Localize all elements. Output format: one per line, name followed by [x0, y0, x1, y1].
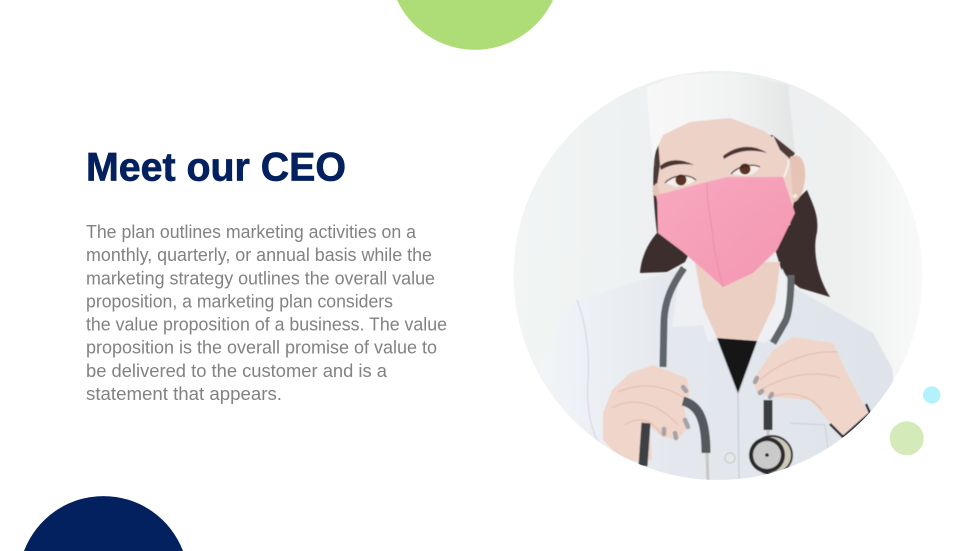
body text: The plan outlines marketing activities on a: [86, 221, 417, 242]
left finger lines: [612, 386, 684, 436]
earring: [793, 194, 797, 198]
decorative dot: cyan: [923, 386, 940, 404]
right nails: [755, 378, 772, 397]
collar right: [758, 268, 788, 342]
left nails: [664, 387, 688, 438]
hair back: [640, 135, 830, 297]
stethoscope chest piece: [764, 400, 772, 430]
coat button: [725, 453, 735, 463]
right finger lines: [757, 352, 840, 410]
stethoscope tubes: [663, 268, 684, 367]
left brow: [660, 160, 694, 170]
watch strap: [830, 404, 870, 437]
left arm and hand: [603, 365, 690, 462]
coat front edge: [717, 338, 757, 480]
body text: [86, 221, 447, 404]
mask: [657, 177, 795, 287]
face: [654, 118, 794, 226]
left sleeve seam: [577, 300, 600, 445]
right arm and hand: [753, 337, 868, 435]
coat body: [638, 270, 893, 480]
body text: marketing strategy outlines the overall value: [86, 267, 435, 288]
photo: doctor in pink mask: [510, 65, 930, 485]
hat: [647, 72, 795, 157]
decorative circle: green top: [397, 0, 553, 50]
ear left: [653, 183, 660, 196]
title: Meet our CEO: [86, 146, 346, 190]
coat pocket: [790, 422, 828, 448]
ear right: [790, 156, 805, 202]
body text: be delivered to the customer and is a: [86, 360, 388, 381]
right eye: [731, 166, 760, 176]
decorative circle: navy bottom: [24, 496, 183, 551]
mask seam: [707, 183, 723, 287]
decorative dot: pale green: [890, 421, 924, 455]
body text: statement that appears.: [86, 383, 282, 404]
body text: proposition, a marketing plan considers: [86, 290, 393, 311]
body text: monthly, quarterly, or annual basis while the: [86, 244, 432, 265]
black undershirt: [717, 338, 757, 393]
neck: [695, 262, 780, 341]
collar left: [673, 266, 716, 341]
temple hair: [772, 135, 796, 160]
right brow: [723, 147, 767, 159]
stethoscope left tube: [683, 401, 706, 453]
left eye: [665, 176, 696, 187]
body text: proposition is the overall promise of value to: [86, 337, 437, 358]
mask loop: [784, 160, 788, 177]
body text: the value proposition of a business. The value: [86, 314, 447, 334]
